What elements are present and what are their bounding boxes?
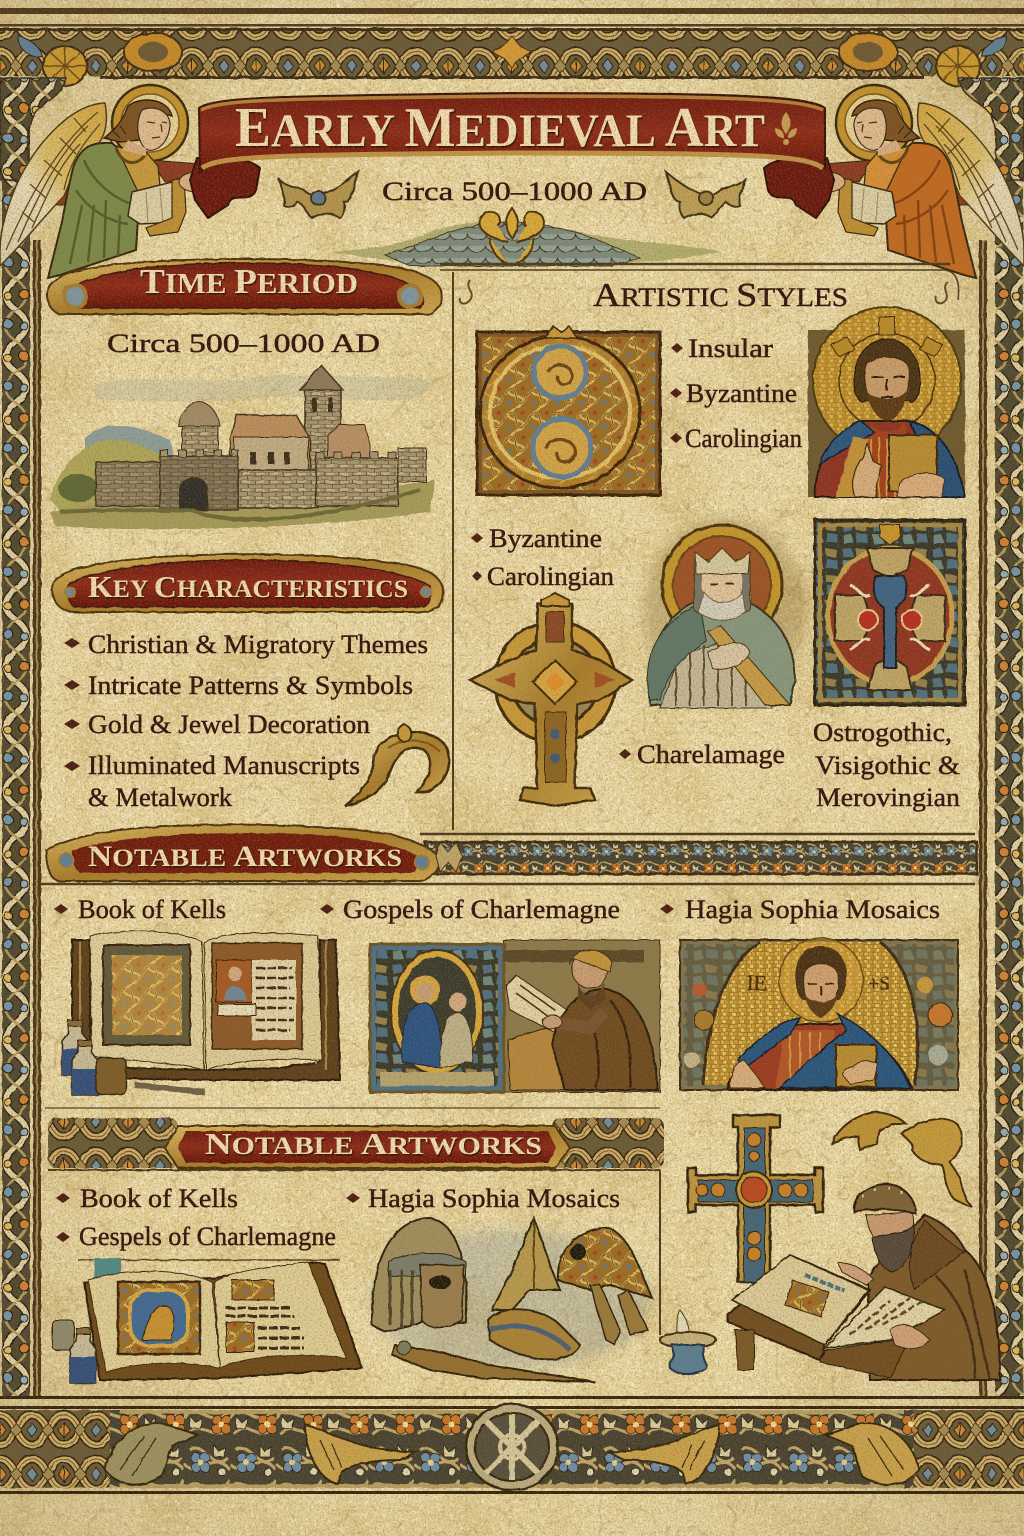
- item: Hagia Sophia Mosaics: Hagia Sophia Mosaics: [685, 895, 940, 924]
- item: Hagia Sophia Mosaics: Hagia Sophia Mosaics: [368, 1184, 620, 1213]
- item: Christian and migratory themes: Christian & Migratory Themes: [88, 630, 428, 659]
- item: Book of Kells: Book of Kells: [80, 1184, 238, 1213]
- artistic styles heading: ARTISTIC STYLES: [593, 277, 848, 314]
- illustration: castle: [50, 365, 435, 529]
- dragon right: [609, 1423, 919, 1485]
- item: Charelamage: Charelamage: [637, 740, 785, 769]
- title banner: [190, 93, 834, 218]
- text: Ostrogothic, Visigothic and Merovingian: [813, 718, 960, 812]
- panel: notable artworks first row: [40, 825, 977, 1095]
- icon: right flourish: [666, 172, 746, 218]
- illustration: jewelled cross: [688, 1115, 823, 1282]
- ornamental band: [425, 842, 977, 874]
- illustration: Hagia Sophia mosaic: IE: [747, 971, 767, 995]
- subtitle with flourishes: [278, 172, 746, 218]
- dragon left: [105, 1423, 415, 1485]
- icon: penannular brooch: [345, 724, 449, 806]
- illustration: open illuminated book: [52, 1258, 362, 1383]
- key characteristics heading: KEY CHARACTERISTICS: [88, 569, 408, 604]
- title text: EARLY MEDIEVAL ART: [235, 97, 765, 159]
- text: Ostrogothic, Visigothic and Merovingian: Visigothic &: [815, 751, 960, 780]
- item: Carolingian: Carolingian: [685, 424, 802, 453]
- item: Gespels of Charlemagne: Gespels of Charlemagne: [79, 1222, 336, 1251]
- item: illuminated manuscripts: & Metalwork: [88, 783, 232, 812]
- item: illuminated manuscripts: [64, 751, 360, 812]
- styles list upper: [670, 334, 802, 453]
- illustration: helmets and armour: [370, 1218, 652, 1382]
- knotwork banner: [48, 1118, 664, 1170]
- left angel holding banner: [0, 85, 215, 278]
- item: Book of Kells: Book of Kells: [78, 895, 226, 924]
- illustration: Celtic cross: [470, 593, 632, 806]
- illustration: monk reading manuscript: [728, 1184, 1000, 1380]
- ink jars: [52, 1320, 96, 1383]
- illustration: Hagia Sophia mosaic: [680, 938, 958, 1090]
- bottom ornamental border: [0, 1396, 1024, 1494]
- panel: time period: [47, 259, 449, 812]
- illustration: Charlemagne figure: [643, 518, 807, 708]
- illustration: illuminated letter: [477, 326, 660, 495]
- icon: title banner flourish: [775, 112, 797, 145]
- item: intricate patterns: Intricate Patterns & Symbols: [88, 671, 413, 700]
- text: Ostrogothic, Visigothic and Merovingian: Ostrogothic,: [813, 718, 952, 747]
- time period banner: [47, 259, 442, 314]
- item: Byzantine: Byzantine: [489, 524, 602, 553]
- characteristics list: [64, 630, 428, 812]
- panel: artistic styles: [470, 277, 965, 812]
- item: Insular: Insular: [688, 334, 773, 363]
- text: Ostrogothic, Visigothic and Merovingian: Merovingian: [816, 783, 960, 812]
- notable artworks banner: [46, 825, 462, 881]
- icon: left flourish: [278, 172, 358, 218]
- illustration: gospels and scribe panel: [370, 940, 660, 1092]
- icon: gold dragon ornaments: [832, 1112, 972, 1207]
- illustration: open Book of Kells: [62, 931, 340, 1095]
- item: Byzantine: Byzantine: [686, 379, 797, 408]
- illustration: Christ icon: [808, 307, 965, 497]
- right angel holding banner: [809, 85, 1024, 278]
- illustration: Hagia Sophia mosaic: +S: [868, 973, 890, 995]
- right ornamental border: [958, 78, 1024, 1398]
- item: Gospels of Charlemagne: Gospels of Charlemagne: [343, 895, 620, 924]
- time period date text: Circa 500–1000 AD: [107, 329, 380, 358]
- panel: notable artworks second section: [45, 1108, 1000, 1383]
- illustration: mosaic cross panel: [815, 520, 965, 705]
- item: gold and jewel decoration: Gold & Jewel Decoration: [88, 710, 370, 739]
- medallion: [466, 1404, 558, 1490]
- key characteristics banner: [52, 554, 443, 612]
- panel: artistic styles frame: [440, 264, 959, 830]
- top ornamental border: [0, 28, 1024, 86]
- landscape hill with fleur-de-lis: [330, 208, 722, 266]
- time period heading: TIME PERIOD: [140, 262, 358, 301]
- subtitle text: Circa 500–1000 AD: [382, 177, 647, 206]
- heading: NOTABLE ARTWORKS: [205, 1126, 542, 1161]
- item: illuminated manuscripts: Illuminated Manuscripts: [88, 751, 360, 780]
- illustration: candle and holder: [660, 1310, 716, 1374]
- left ornamental border: [0, 78, 66, 1398]
- ink jars: [62, 1020, 126, 1095]
- item: Carolingian: Carolingian: [487, 562, 614, 591]
- heading: NOTABLE ARTWORKS: [88, 840, 402, 873]
- styles list lower: [471, 524, 614, 591]
